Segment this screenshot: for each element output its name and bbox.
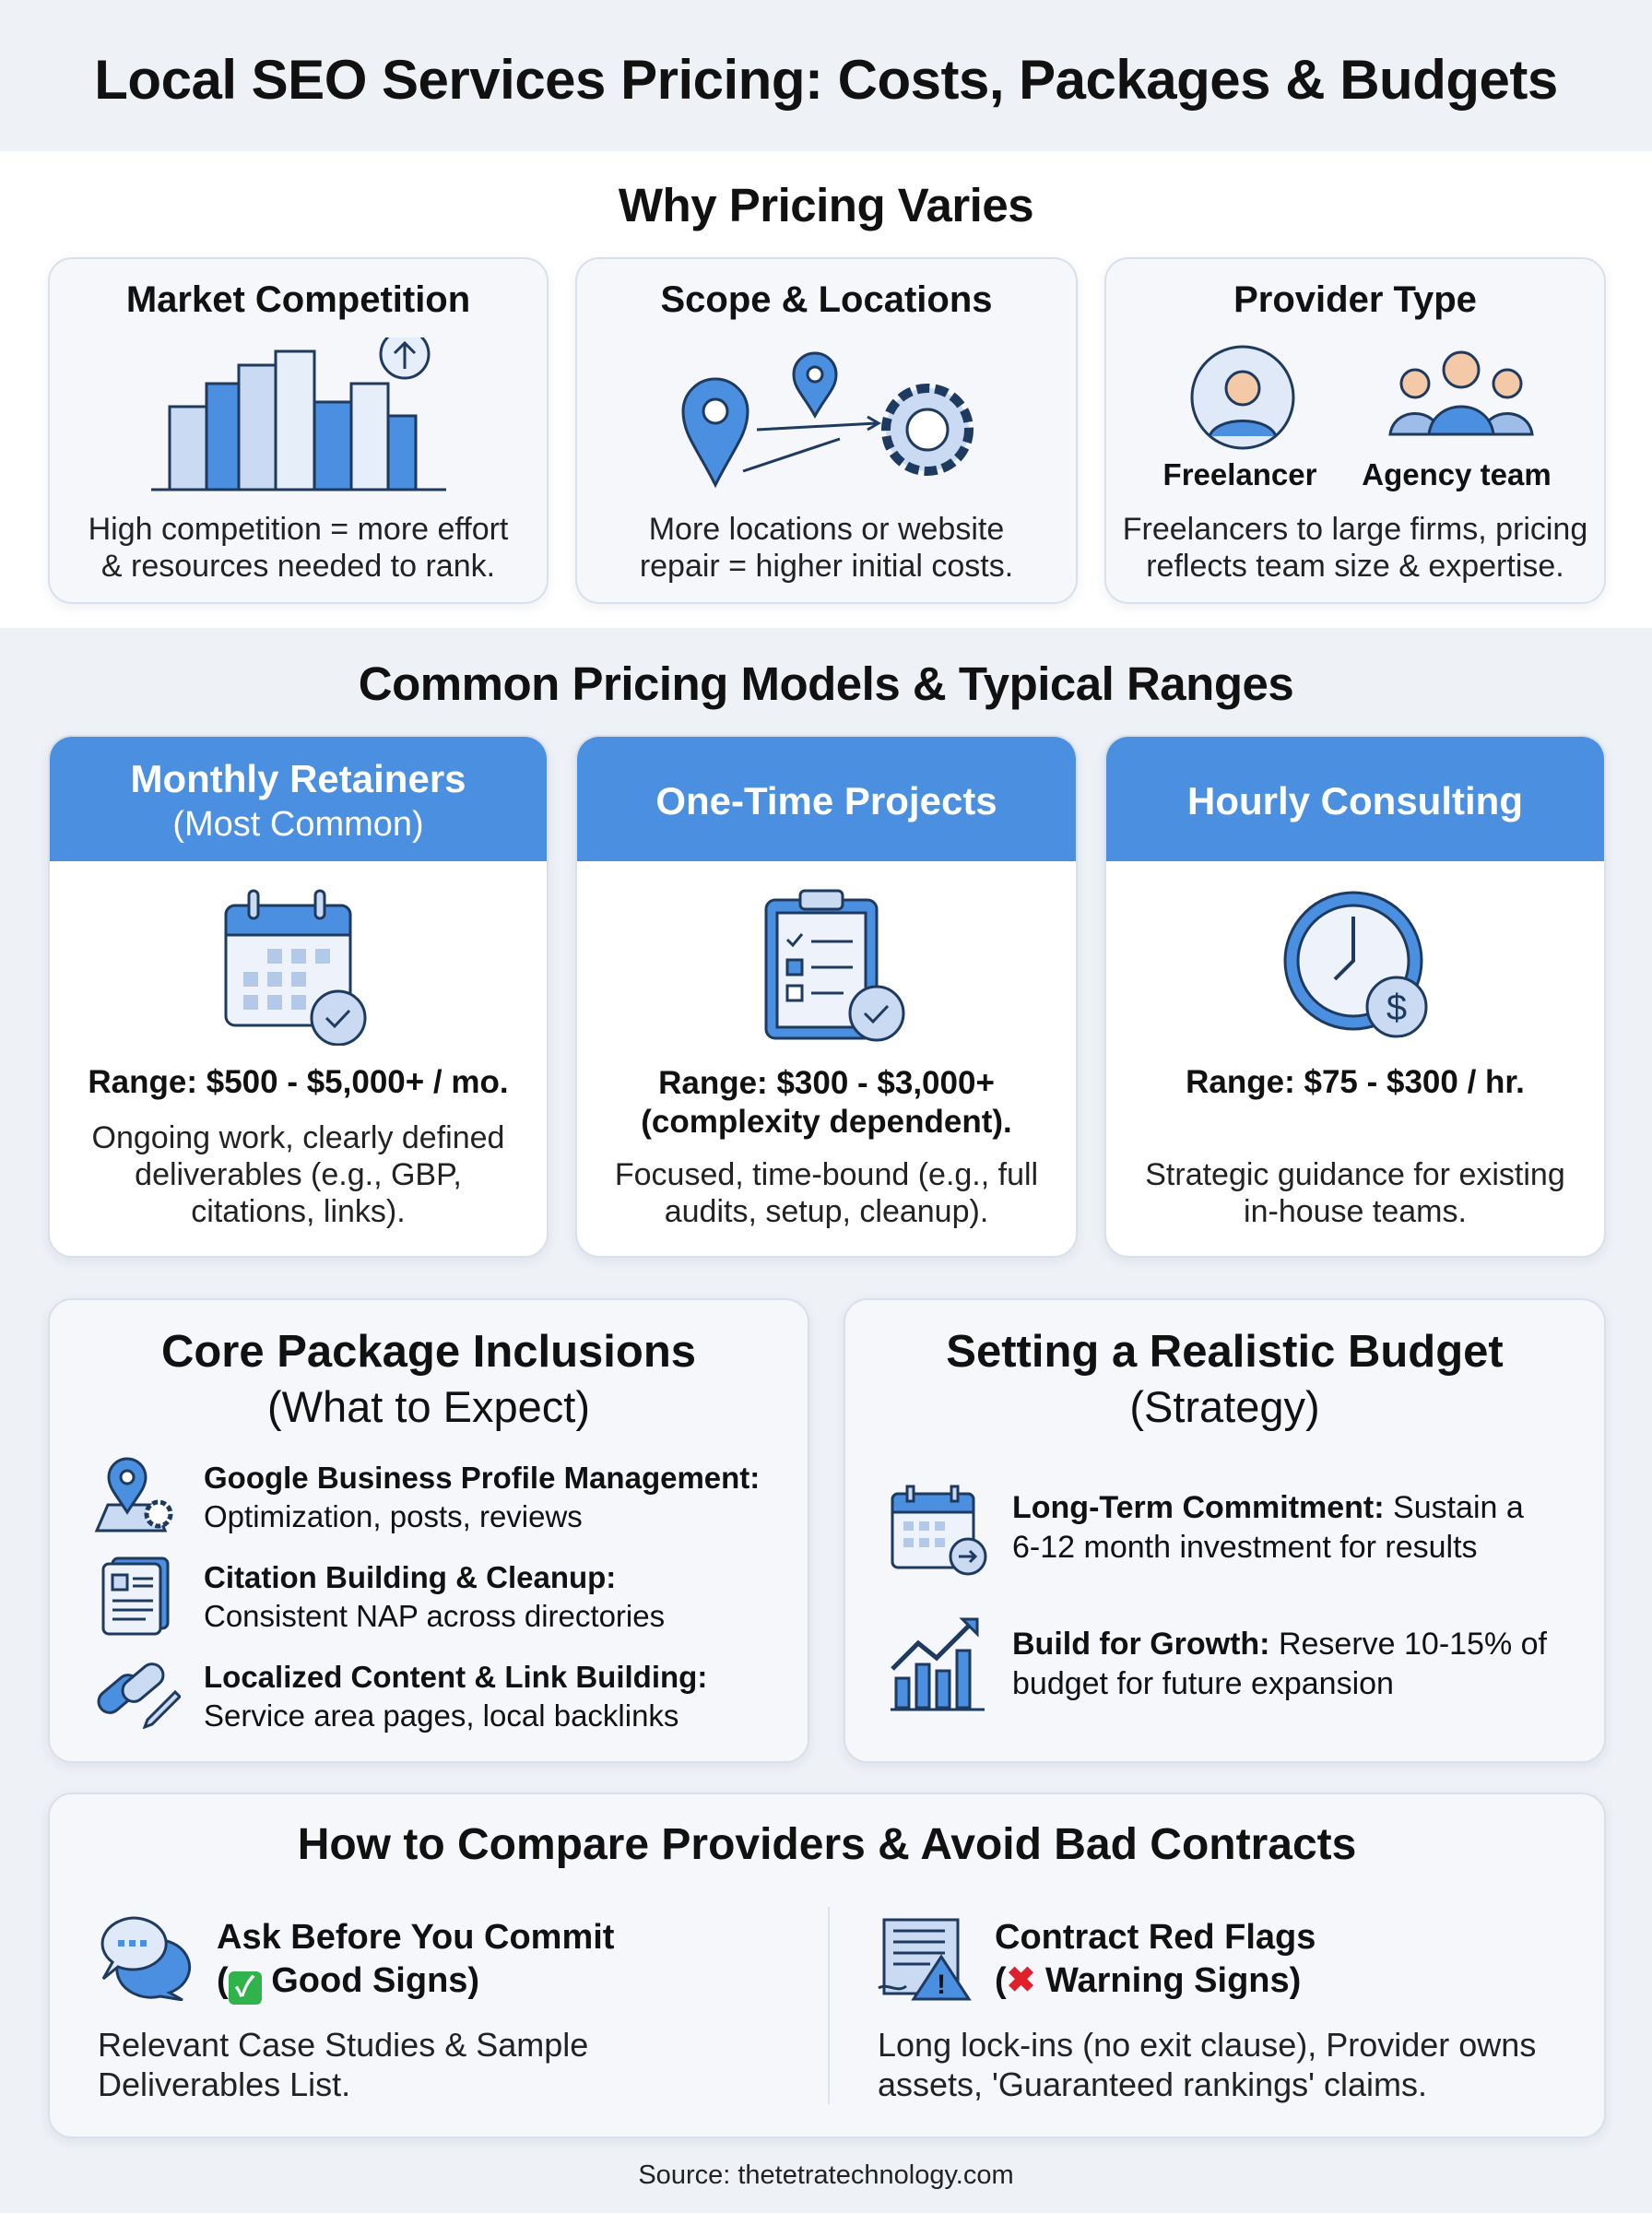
text: contract red flags: Contract Red Flags bbox=[995, 1918, 1316, 1957]
panel: monthly retainers: Monthly Retainers bbox=[130, 757, 466, 800]
text: ask before you commit: Ask Before You Commit bbox=[217, 1918, 614, 1957]
panel: provider type bbox=[1104, 257, 1606, 604]
text: ask before you commit: ✓ bbox=[235, 1972, 254, 2003]
panel: market competition: Market Competition bbox=[126, 279, 470, 320]
panel: core package inclusions: Service area pages, local backlinks bbox=[204, 1698, 678, 1733]
panel: one-time projects: One-Time Projects bbox=[655, 779, 997, 822]
panel: core package inclusions: Citation Building & Cleanup: bbox=[204, 1560, 616, 1594]
panel: core package inclusions bbox=[48, 1298, 809, 1763]
panel: hourly consulting: Hourly Consulting bbox=[1187, 779, 1523, 822]
panel: provider type: Provider Type bbox=[1233, 279, 1477, 320]
icon: clock bbox=[1283, 891, 1427, 1038]
panel: compare providers: Relevant Case Studies & Sample bbox=[98, 2026, 588, 2064]
icon: pins and gear bbox=[682, 352, 974, 489]
panel: monthly retainers: citations, links). bbox=[191, 1194, 406, 1229]
icon: freelancer bbox=[1191, 345, 1294, 450]
panel: scope & locations bbox=[575, 257, 1078, 604]
panel: monthly retainers: deliverables (e.g., GBP, bbox=[135, 1157, 462, 1192]
panel: core package inclusions: (What to Expect) bbox=[267, 1382, 590, 1431]
text: contract red flags: (✖ Warning Signs) bbox=[995, 1961, 1301, 2000]
panel: market competition: High competition = more effort bbox=[88, 512, 508, 547]
panel: hourly consulting: in-house teams. bbox=[1244, 1194, 1467, 1229]
panel: one-time projects: Focused, time-bound (e.g., full bbox=[615, 1157, 1038, 1192]
panel: hourly consulting: Range: $75 - $300 / hr. bbox=[1186, 1064, 1525, 1100]
panel: setting a realistic budget: Long-Term Commitment: Sustain a bbox=[1012, 1490, 1524, 1525]
panel: setting a realistic budget: 6-12 month investment for results bbox=[1012, 1530, 1478, 1565]
panel: hourly consulting bbox=[1104, 735, 1606, 1258]
panel: one-time projects bbox=[575, 735, 1078, 1258]
panel: provider type: Freelancer bbox=[1163, 457, 1316, 491]
panel: core package inclusions: Optimization, posts, reviews bbox=[204, 1499, 583, 1533]
panel: monthly retainers bbox=[48, 735, 549, 1258]
icon: map pin gear bbox=[94, 1457, 173, 1533]
panel: compare providers bbox=[48, 1793, 1606, 2138]
heading: pricing models: Common Pricing Models & Typical Ranges bbox=[359, 657, 1293, 710]
panel: compare providers: assets, 'Guaranteed rankings' claims. bbox=[878, 2065, 1427, 2103]
icon: chat bubbles bbox=[101, 1916, 192, 2001]
icon: contract warning bbox=[878, 1918, 972, 2001]
panel: core package inclusions: Core Package Inclusions bbox=[161, 1327, 696, 1377]
icon: calendar bbox=[225, 889, 367, 1046]
text: ask before you commit bbox=[217, 1918, 614, 2005]
panel: scope & locations: repair = higher initial costs. bbox=[640, 549, 1013, 584]
panel: core package inclusions: Google Business Profile Management: bbox=[204, 1461, 760, 1495]
panel: scope & locations: More locations or website bbox=[649, 512, 1004, 547]
panel: setting a realistic budget: (Strategy) bbox=[1129, 1382, 1320, 1431]
panel: compare providers: How to Compare Providers & Avoid Bad Contracts bbox=[298, 1820, 1356, 1869]
icon: citation document bbox=[101, 1556, 170, 1636]
panel: scope & locations: Scope & Locations bbox=[660, 279, 993, 320]
text: contract red flags bbox=[995, 1918, 1316, 2000]
heading: Why Pricing Varies bbox=[619, 179, 1033, 231]
panel: market competition: & resources needed to rank. bbox=[101, 549, 495, 584]
text: ask before you commit: ( Good Signs) bbox=[217, 1961, 479, 2000]
icon: growth chart bbox=[891, 1617, 985, 1711]
source: Source: thetetratechnology.com bbox=[638, 2160, 1014, 2190]
title: Local SEO Services Pricing: Costs, Packages & Budgets bbox=[94, 49, 1558, 111]
icon: calendar arrow bbox=[891, 1485, 986, 1575]
panel: compare providers: Deliverables List. bbox=[98, 2065, 350, 2103]
title band bbox=[0, 0, 1652, 151]
panel: setting a realistic budget: Setting a Realistic Budget bbox=[946, 1327, 1504, 1377]
panel: market competition bbox=[48, 257, 549, 604]
icon: contract warning: ! bbox=[937, 1970, 946, 2000]
panel: core package inclusions: Localized Content & Link Building: bbox=[204, 1660, 707, 1694]
panel: one-time projects: (complexity dependent). bbox=[641, 1104, 1012, 1140]
icon: city bbox=[151, 337, 446, 491]
panel: setting a realistic budget: budget for future expansion bbox=[1012, 1666, 1394, 1701]
panel: provider type: Freelancers to large firms, pricing bbox=[1123, 512, 1587, 547]
section: why pricing varies bbox=[0, 151, 1652, 628]
panel: monthly retainers: (Most Common) bbox=[172, 805, 424, 844]
icon: agency team bbox=[1388, 350, 1534, 435]
panel: monthly retainers: Range: $500 - $5,000+ / mo. bbox=[88, 1064, 509, 1100]
panel: hourly consulting: Strategic guidance for existing bbox=[1145, 1157, 1565, 1192]
panel: one-time projects: audits, setup, cleanup). bbox=[665, 1194, 988, 1229]
panel: one-time projects: Range: $300 - $3,000+ bbox=[658, 1065, 995, 1101]
icon: checklist bbox=[765, 889, 905, 1042]
panel: monthly retainers: Ongoing work, clearly defined bbox=[92, 1120, 504, 1155]
panel: provider type: reflects team size & expertise. bbox=[1146, 549, 1564, 584]
panel: provider type: Agency team bbox=[1362, 457, 1552, 491]
panel: setting a realistic budget: Build for Growth: Reserve 10-15% of bbox=[1012, 1627, 1547, 1662]
icon: link bbox=[98, 1663, 181, 1729]
panel: core package inclusions: Consistent NAP across directories bbox=[204, 1599, 665, 1633]
panel: setting a realistic budget bbox=[844, 1298, 1606, 1763]
panel: compare providers: Long lock-ins (no exit clause), Provider owns bbox=[878, 2026, 1536, 2064]
icon: clock: $ bbox=[1386, 988, 1407, 1028]
